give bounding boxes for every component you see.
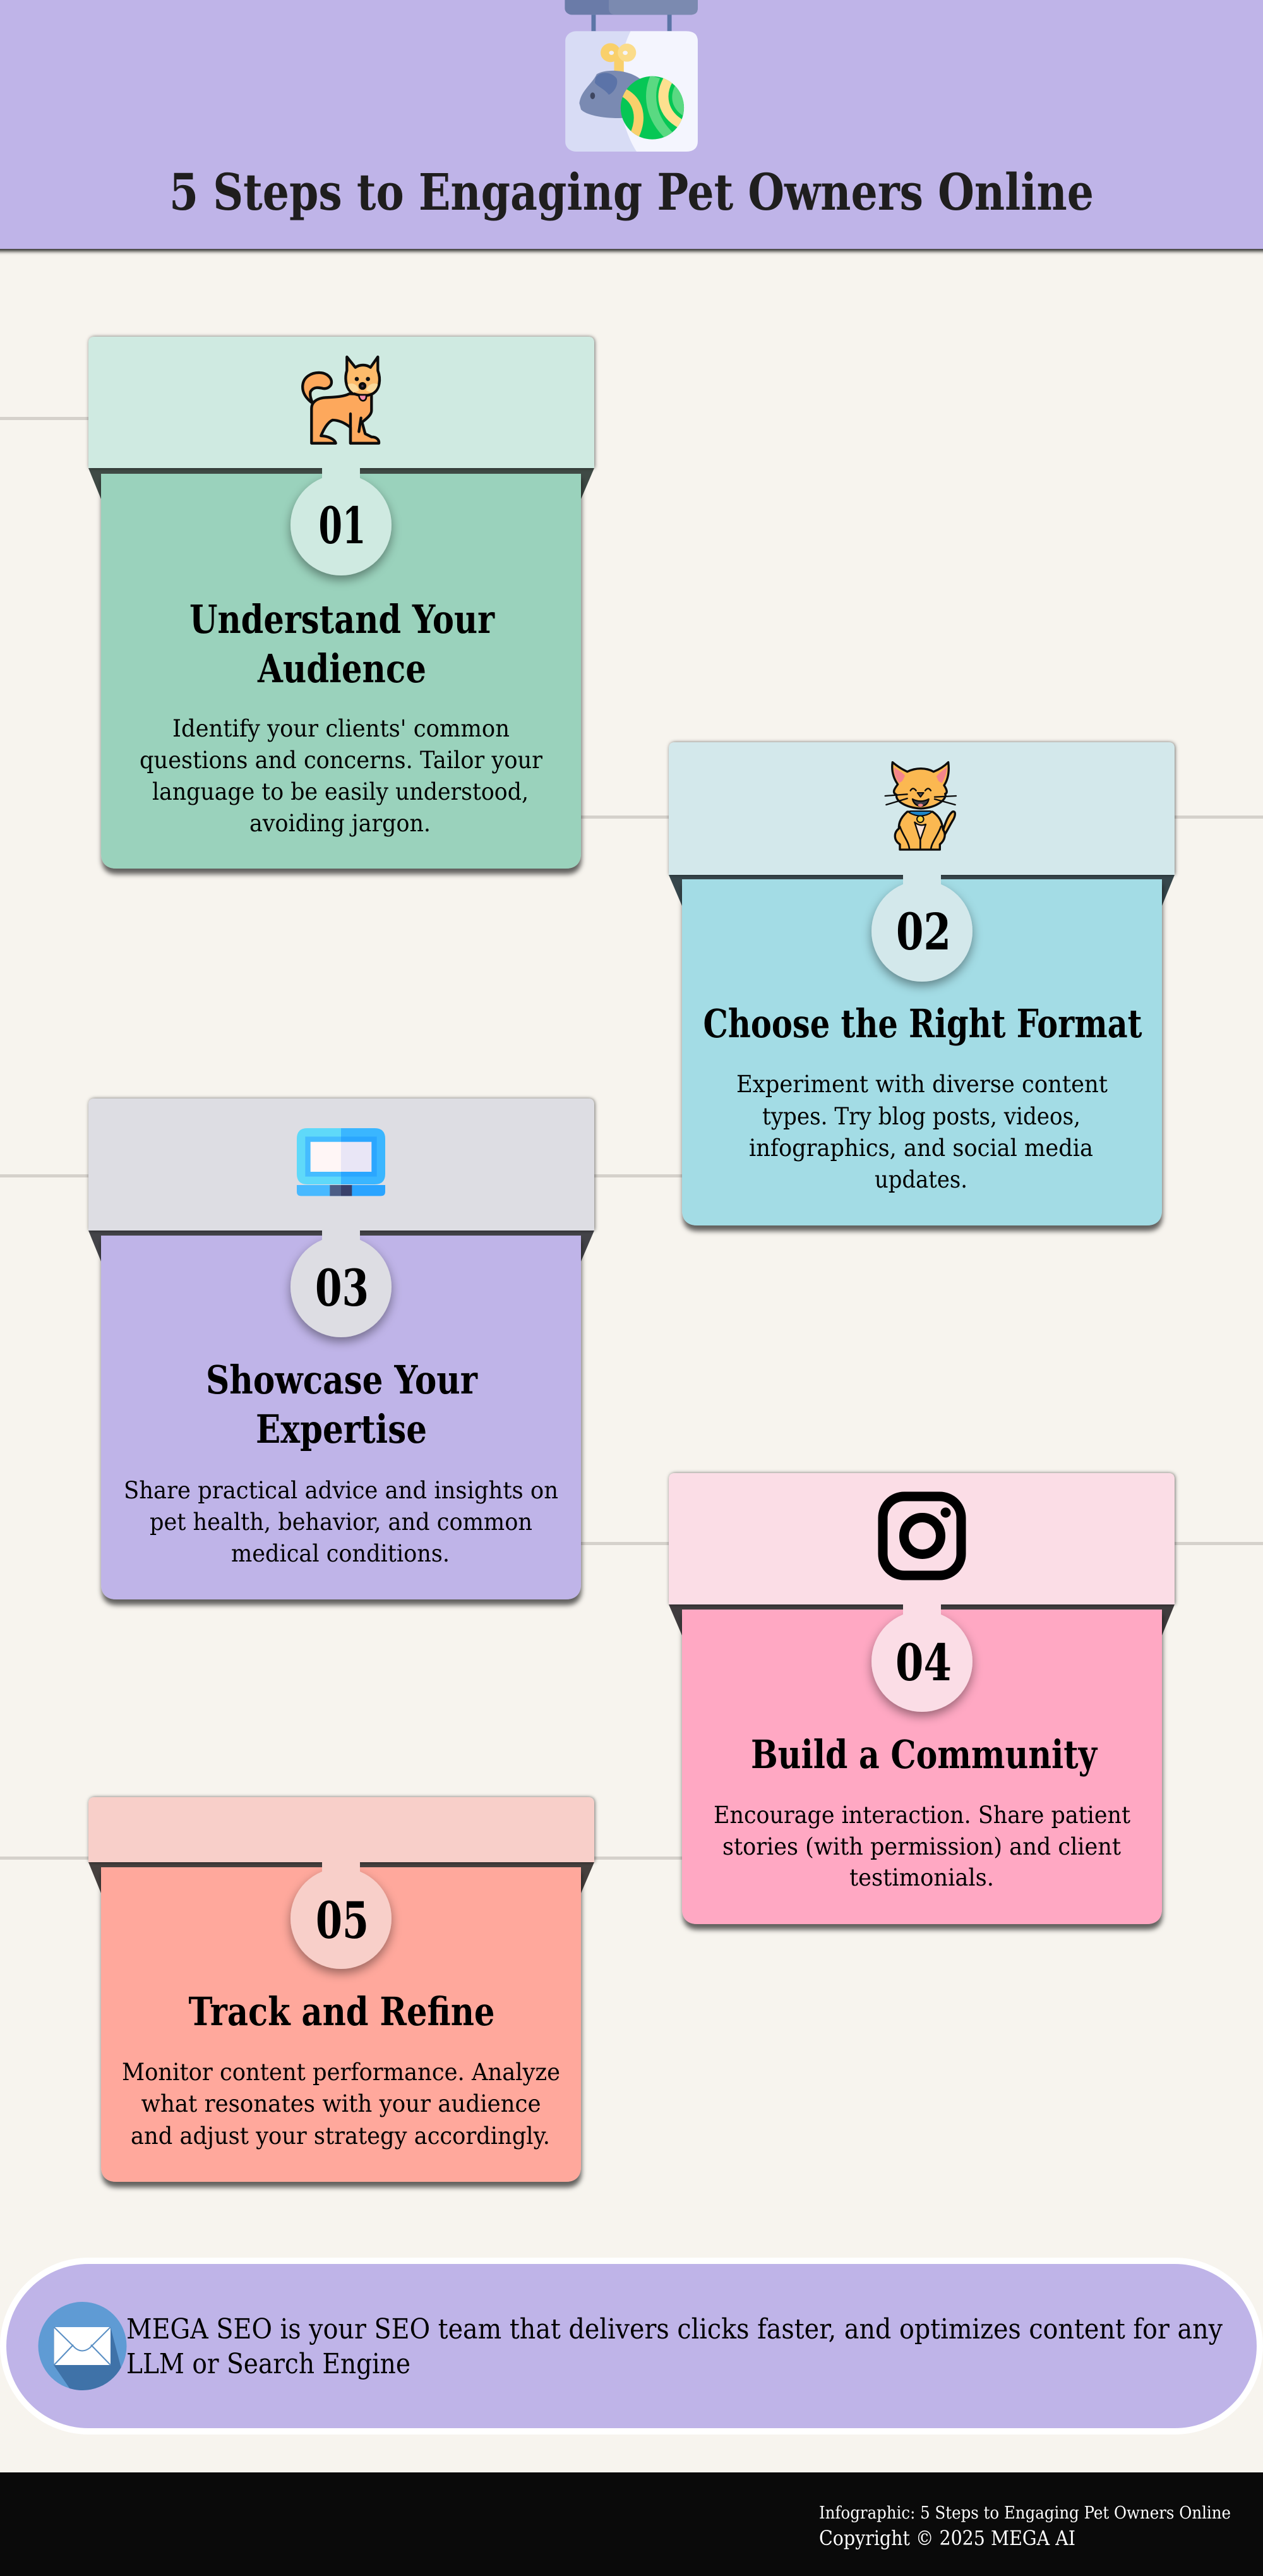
number: 02 [896, 902, 951, 961]
panel: step 03 [88, 1098, 594, 1599]
description [714, 1802, 1130, 1891]
heading: Audience [257, 646, 426, 692]
description: and adjust your strategy accordingly. [131, 2122, 550, 2150]
number: 01 [318, 496, 366, 555]
panel: step 05 [88, 1797, 594, 2182]
banner text: LLM or Search Engine [126, 2348, 410, 2380]
header band [0, 0, 1263, 249]
footer text [819, 2503, 1231, 2550]
icon: instagram [883, 1496, 961, 1575]
heading: Track and Refine [188, 1989, 495, 2035]
description: medical conditions. [231, 1540, 450, 1567]
icon: dog [302, 357, 380, 443]
panel: step 04 [669, 1473, 1175, 1924]
icon: laptop [297, 1128, 385, 1196]
description: avoiding jargon. [249, 810, 431, 837]
description: pet health, behavior, and common [150, 1508, 532, 1536]
description: types. Try blog posts, videos, [762, 1103, 1080, 1130]
heading [189, 596, 495, 692]
title: 5 Steps to Engaging Pet Owners Online [169, 162, 1094, 222]
callout: MEGA SEO banner [3, 2261, 1260, 2431]
heading [206, 1357, 478, 1452]
description: Experiment with diverse content [736, 1071, 1108, 1098]
number: 05 [316, 1891, 369, 1950]
icon: hanging sign with toy mouse and ball [565, 0, 698, 152]
heading: Choose the Right Format [703, 1001, 1142, 1047]
description: Encourage interaction. Share patient [714, 1802, 1130, 1829]
number: 03 [315, 1258, 369, 1318]
description [124, 1477, 558, 1567]
heading: Showcase Your [206, 1357, 478, 1403]
heading: Understand Your [189, 596, 495, 642]
description: infographics, and social media [749, 1135, 1093, 1162]
description [736, 1071, 1108, 1193]
description: language to be easily understood, [152, 778, 529, 805]
description: Identify your clients' common [172, 715, 510, 742]
heading: Build a Community [751, 1731, 1098, 1778]
footer text: Copyright © 2025 MEGA AI [819, 2526, 1075, 2550]
description [122, 2059, 560, 2150]
panel: step 01 [88, 337, 594, 869]
description: Share practical advice and insights on [124, 1477, 558, 1504]
icon: envelope [38, 2302, 126, 2390]
description: what resonates with your audience [141, 2090, 541, 2117]
icon: cat [885, 762, 956, 850]
heading: Expertise [256, 1406, 427, 1452]
description [140, 715, 542, 837]
description: testimonials. [849, 1864, 994, 1891]
number: 04 [895, 1633, 952, 1692]
footer text: Infographic: 5 Steps to Engaging Pet Owners Online [819, 2503, 1231, 2523]
description: questions and concerns. Tailor your [140, 747, 542, 774]
description: updates. [875, 1166, 967, 1193]
panel: step 02 [669, 742, 1175, 1225]
description: Monitor content performance. Analyze [122, 2059, 560, 2086]
description: stories (with permission) and client [722, 1833, 1121, 1860]
connector lines [0, 417, 1263, 1860]
banner text [126, 2313, 1223, 2380]
footer [0, 2472, 1263, 2576]
